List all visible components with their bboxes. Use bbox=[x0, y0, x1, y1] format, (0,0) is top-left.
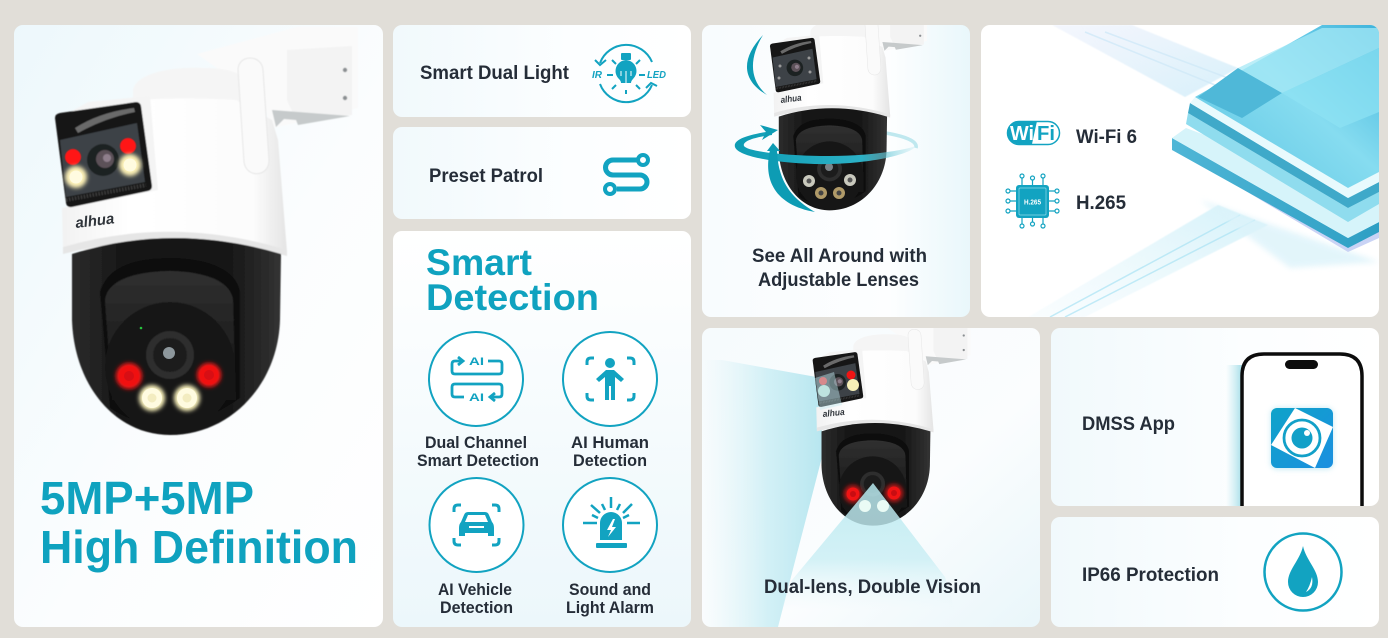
logo: dahua on main camera: alhua bbox=[74, 210, 115, 232]
panel: Dual-lens, Double Vision bbox=[702, 313, 1040, 627]
chip illustration bbox=[1028, 25, 1379, 317]
icon: AI human bbox=[563, 332, 657, 426]
icon: patrol route bbox=[605, 155, 648, 194]
icon: IR / LED bulb: LED bbox=[647, 70, 666, 81]
icon: dual channel: AI bbox=[469, 392, 484, 404]
caption: AI Vehicle Detection bbox=[438, 580, 513, 617]
icon: AI vehicle bbox=[430, 478, 524, 572]
panel: Preset Patrol bbox=[393, 127, 691, 219]
label: H.265: H.265 bbox=[1076, 193, 1126, 214]
icon: H.265 chip: H.265 bbox=[1024, 200, 1041, 206]
beam: side lens bbox=[720, 360, 822, 627]
caption: Sound and Light Alarm: Light Alarm bbox=[566, 598, 654, 617]
icon: WiFi badge bbox=[1008, 121, 1060, 145]
caption: See All Around with Adjustable Lenses: Adjustable Lenses bbox=[758, 270, 919, 291]
arrow: upper lens arc bbox=[747, 35, 767, 95]
camera: rotating with arrows bbox=[734, 25, 924, 212]
arrow: vertical tilt bbox=[768, 150, 815, 212]
caption: Dual Channel Smart Detection: Dual Channel bbox=[425, 433, 527, 452]
icon: alarm beacon bbox=[563, 478, 657, 572]
label: DMSS App: DMSS App bbox=[1082, 414, 1175, 435]
panel: Wi-Fi 6 and H.265 bbox=[981, 25, 1379, 317]
caption: See All Around with Adjustable Lenses bbox=[752, 246, 927, 291]
icon: IR / LED bulb bbox=[592, 45, 666, 102]
caption: Sound and Light Alarm: Sound and bbox=[569, 580, 651, 599]
icon: dual channel bbox=[429, 332, 523, 426]
label: Dual-lens, Double Vision: Dual-lens, Double Vision bbox=[764, 577, 981, 598]
caption: AI Human Detection: AI Human bbox=[571, 433, 649, 452]
caption: Dual Channel Smart Detection: Smart Detection bbox=[417, 451, 539, 470]
icon: water drop bbox=[1264, 534, 1342, 610]
arrow: horizontal rotation bbox=[735, 131, 916, 164]
icon: WiFi badge: Wi bbox=[1010, 123, 1034, 145]
panel: 5MP+5MP High Definition bbox=[14, 25, 383, 627]
panel: IP66 Protection bbox=[1051, 517, 1379, 627]
heading: Smart: Smart bbox=[426, 242, 532, 283]
caption: See All Around with Adjustable Lenses: See All Around with bbox=[752, 246, 927, 267]
heading: High Definition: High Definition bbox=[40, 521, 358, 573]
label: Preset Patrol: Preset Patrol bbox=[429, 166, 543, 187]
panel: Smart Detection bbox=[393, 231, 691, 627]
camera: dual-lens with beams bbox=[813, 313, 971, 526]
panel: See All Around bbox=[702, 0, 970, 317]
lens glint bbox=[163, 347, 175, 359]
icon: dual channel: AI bbox=[469, 356, 484, 368]
label: IP66 Protection: IP66 Protection bbox=[1082, 565, 1219, 586]
caption: AI Human Detection bbox=[571, 433, 649, 470]
icon: H.265 chip bbox=[1006, 174, 1059, 228]
caption: Sound and Light Alarm bbox=[566, 580, 654, 617]
caption: AI Human Detection: Detection bbox=[573, 451, 647, 470]
caption: AI Vehicle Detection: Detection bbox=[440, 598, 513, 617]
panel: DMSS App bbox=[1051, 328, 1379, 506]
icon: phone with app bbox=[1226, 354, 1362, 506]
panel: Smart Dual Light bbox=[393, 25, 691, 117]
label: Smart Dual Light: Smart Dual Light bbox=[420, 63, 570, 84]
heading: 5MP+5MP: 5MP+5MP bbox=[40, 472, 254, 524]
caption: Dual Channel Smart Detection bbox=[417, 433, 539, 470]
caption: AI Vehicle Detection: AI Vehicle bbox=[438, 580, 512, 599]
camera: main dual-lens PTZ bbox=[55, 27, 358, 435]
icon: WiFi badge: Fi bbox=[1037, 123, 1055, 145]
beam: main lens bbox=[788, 483, 948, 593]
label: Wi-Fi 6: Wi-Fi 6 bbox=[1076, 127, 1137, 148]
LEDs: main camera bbox=[65, 138, 221, 411]
heading: Detection: Detection bbox=[426, 277, 599, 318]
logo: dahua on rotating camera: alhua bbox=[780, 93, 802, 105]
logo: dahua on dual-lens camera: alhua bbox=[822, 407, 845, 419]
icon: IR / LED bulb: IR bbox=[592, 70, 603, 81]
